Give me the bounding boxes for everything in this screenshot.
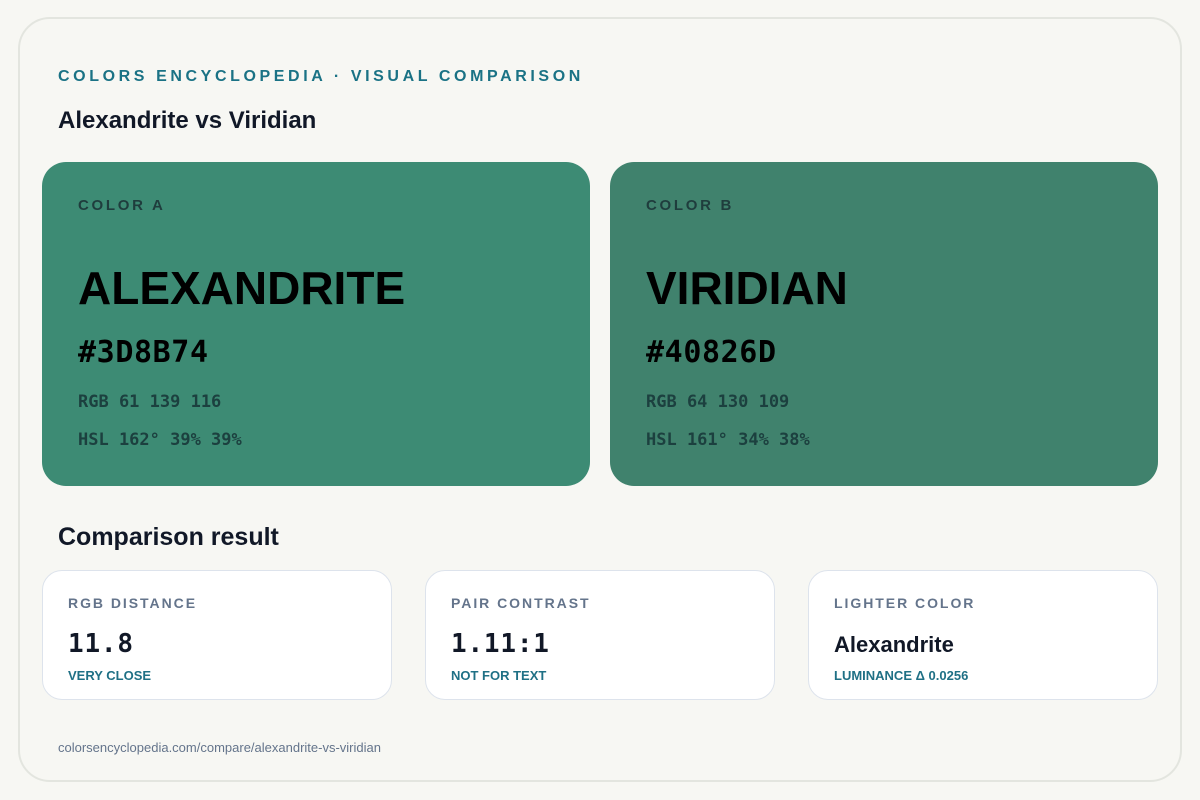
card note: VERY CLOSE — [68, 668, 151, 683]
color A name: ALEXANDRITE — [78, 262, 405, 314]
color A RGB: RGB 61 139 116 — [78, 392, 221, 412]
card value: Alexandrite — [834, 632, 954, 657]
card label: PAIR CONTRAST — [451, 595, 591, 611]
color A HSL: HSL 162° 39% 39% — [78, 430, 242, 450]
color B name: VIRIDIAN — [646, 262, 848, 314]
color A label: COLOR A — [78, 197, 166, 214]
color A hex: #3D8B74 — [78, 335, 209, 370]
footer URL: colorsencyclopedia.com/compare/alexandrite-vs-viridian — [58, 740, 381, 755]
card label: LIGHTER COLOR — [834, 595, 975, 611]
section heading: Comparison result — [58, 523, 279, 551]
title: Alexandrite vs Viridian — [58, 107, 316, 134]
card value: 1.11:1 — [451, 629, 550, 659]
card: RGB distance — [42, 570, 392, 700]
panel: color A — [42, 162, 590, 486]
color B label: COLOR B — [646, 197, 734, 214]
panel: color B — [610, 162, 1158, 486]
card: lighter color — [808, 570, 1158, 700]
card label: RGB DISTANCE — [68, 595, 197, 611]
card: pair contrast — [425, 570, 775, 700]
card note: NOT FOR TEXT — [451, 668, 546, 683]
card note: LUMINANCE Δ 0.0256 — [834, 668, 968, 683]
color B hex: #40826D — [646, 335, 777, 370]
eyebrow: COLORS ENCYCLOPEDIA · VISUAL COMPARISON — [58, 68, 584, 85]
color B RGB: RGB 64 130 109 — [646, 392, 789, 412]
card value: 11.8 — [68, 629, 134, 659]
color B HSL: HSL 161° 34% 38% — [646, 430, 810, 450]
